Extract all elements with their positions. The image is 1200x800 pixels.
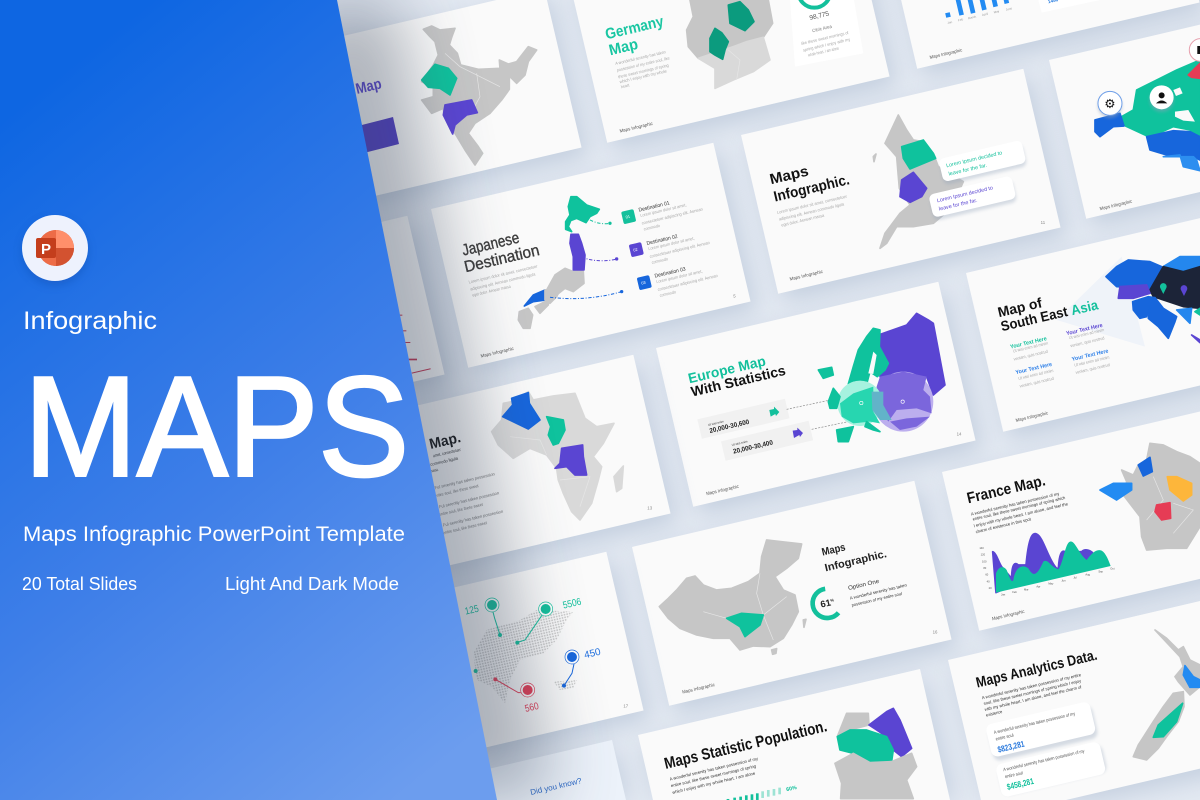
panel shadow bbox=[300, 0, 555, 800]
icon: person marker bbox=[1150, 85, 1174, 112]
asia heading bbox=[996, 294, 1100, 334]
new zealand map bbox=[1133, 630, 1200, 760]
chart footer: Maps Infographic bbox=[929, 47, 963, 60]
chart value card bbox=[1038, 0, 1100, 13]
africa body text: massa. bbox=[430, 467, 439, 474]
uk callout one bbox=[938, 140, 1027, 185]
area chart bbox=[979, 534, 1115, 596]
dotted map bbox=[473, 610, 577, 703]
destination 01: consectetuer adipiscing elit. Aenean bbox=[641, 206, 704, 226]
africa map bbox=[492, 392, 623, 520]
destination 01 bbox=[621, 201, 704, 232]
icon: map marker bbox=[1189, 39, 1200, 61]
marker 5506: 5506 bbox=[562, 597, 583, 612]
destination 02: commodo bbox=[651, 256, 669, 265]
slide: Japanese Destination bbox=[431, 143, 758, 376]
china footer: Maps Infographic bbox=[682, 682, 716, 695]
icon: PowerPoint logo: P bbox=[41, 241, 51, 258]
dots page number: 17 bbox=[623, 703, 629, 708]
asia bullet text bbox=[1012, 327, 1111, 389]
bar chart: Feb bbox=[958, 17, 964, 22]
analytics card two: A wonderful serenity has taken possession of my bbox=[1003, 748, 1086, 772]
germany body text: heart. bbox=[620, 82, 631, 89]
germany stat card: like these sweet mornings of bbox=[801, 30, 850, 46]
uk callout two bbox=[928, 176, 1017, 221]
population pictogram bbox=[727, 785, 798, 800]
population body text: which I enjoy with my whole heart. I am alone bbox=[672, 771, 756, 795]
europe heading: Europe Map bbox=[686, 353, 767, 386]
analytics card two: $458,281 bbox=[1006, 776, 1035, 792]
analytics body text: A wonderful serenity has taken possession of my entire bbox=[981, 672, 1082, 700]
population body text: entire soul, like these sweet mornings of spring bbox=[670, 763, 757, 788]
europe stat card one: 20,000-30,600 bbox=[709, 419, 750, 435]
population pictogram: 60% bbox=[786, 785, 798, 793]
asia bullets: Your Text Here bbox=[1015, 362, 1053, 376]
title: MAPS: MAPS bbox=[24, 348, 409, 506]
mode note: Light And Dark Mode bbox=[225, 574, 399, 594]
marker 450: 450 bbox=[583, 647, 602, 661]
africa page number: 13 bbox=[647, 506, 653, 511]
germany body text: A wonderful serenity has taken bbox=[615, 49, 667, 66]
germany heading: Map bbox=[607, 36, 640, 59]
uk callout two: Lorem Ipsum decided to bbox=[936, 185, 994, 204]
china map bbox=[659, 540, 806, 654]
destination 02: Destination 02 bbox=[646, 234, 678, 247]
slide: Africa Map: Ful serenity has taken possession bbox=[442, 509, 504, 528]
uk footer: Maps Infographic bbox=[789, 269, 824, 282]
analytics body text: existence bbox=[985, 709, 1003, 718]
america footer: Maps Infographic bbox=[1099, 199, 1133, 211]
destination 01: Destination 01 bbox=[638, 201, 670, 214]
slide: China Maps Infographic bbox=[632, 481, 959, 714]
uk body text bbox=[776, 194, 848, 228]
slide: Maps Analytics Data bbox=[948, 594, 1200, 800]
population heading: Maps Statistic Population. bbox=[663, 718, 829, 773]
area chart: 20 bbox=[989, 586, 992, 590]
area chart: 100 bbox=[982, 559, 987, 563]
europe heading: With Statistics bbox=[689, 362, 787, 400]
africa body text: commodo ligula bbox=[430, 455, 459, 467]
slide: bar chart bbox=[880, 0, 1200, 77]
area chart: Oct bbox=[1110, 567, 1115, 571]
area chart: 40 bbox=[987, 579, 990, 583]
slide: bottom tinted slide bbox=[356, 740, 630, 800]
asia bullet text: veniam, quis nostrud bbox=[1019, 376, 1055, 389]
uk map bbox=[873, 115, 963, 248]
europe footer: Maps Infographic bbox=[706, 484, 740, 496]
area chart: May bbox=[1048, 582, 1054, 586]
slide: Africa Map: entire soul, like these sweet bbox=[438, 502, 484, 517]
destination 02: consectetuer adipiscing elit. Aenean bbox=[649, 240, 711, 259]
france map bbox=[1100, 443, 1200, 550]
europe stat card two: 20,000-30,400 bbox=[733, 439, 774, 456]
asia bullet text: veniam, quis nostrud bbox=[1070, 335, 1105, 348]
uk heading: Maps bbox=[768, 164, 810, 188]
area chart: 60 bbox=[985, 573, 989, 577]
france body text: A wonderful serenity has taken possession of my bbox=[970, 491, 1061, 517]
germany population map bbox=[835, 708, 917, 799]
france body text: I enjoy with my whole heart. I am alone, and feel the bbox=[973, 501, 1069, 528]
japan body text: Lorem ipsum dolor sit amet, consectetuer bbox=[468, 263, 538, 285]
destination 01: Lorem ipsum dolor sit amet, bbox=[640, 202, 687, 218]
analytics heading: Maps Analytics Data. bbox=[975, 648, 1099, 692]
germany stat card: 98,775 bbox=[809, 10, 830, 22]
bar chart: June bbox=[1005, 6, 1013, 12]
japan body text: eget dolor. Aenean massa bbox=[472, 284, 512, 298]
asia bullet text: Ut wisi enim ad minim bbox=[1068, 327, 1105, 340]
germany body text: these sweet mornings of spring bbox=[618, 63, 670, 79]
asia footer: Maps Infographic bbox=[1015, 410, 1049, 423]
europe stat card two bbox=[721, 421, 813, 461]
asia bullet text: veniam, quis nostrud bbox=[1013, 349, 1049, 362]
analytics card two: entire soul bbox=[1004, 770, 1023, 779]
area chart: Jan bbox=[1001, 592, 1006, 596]
europe stat card one bbox=[697, 399, 790, 439]
destination 01: commodo bbox=[643, 223, 661, 232]
japan dashed connectors bbox=[550, 220, 622, 299]
subtitle: Infographic: Infographic bbox=[23, 307, 157, 335]
population body text bbox=[669, 756, 759, 795]
destination 02: Lorem ipsum dolor sit amet, bbox=[648, 236, 695, 251]
area chart: Sep bbox=[1098, 570, 1104, 574]
asia light backdrop bbox=[1057, 257, 1145, 347]
destination 03: consectetuer adipiscing elit. Aenean bbox=[657, 273, 719, 292]
north america map bbox=[1095, 60, 1200, 171]
analytics card one: $823,281 bbox=[996, 739, 1026, 755]
slide: Germany map bbox=[570, 0, 897, 151]
population body text: A wonderful serenity has taken possession of my bbox=[669, 756, 759, 782]
asia heading: Map of bbox=[996, 294, 1044, 320]
left location dot bbox=[474, 669, 478, 673]
area chart: Apr bbox=[1036, 585, 1041, 589]
slide count: 20 Total Slides bbox=[22, 574, 137, 594]
germany body text: possession of my entire soul, like bbox=[616, 55, 671, 73]
uk heading: Infographic. bbox=[772, 172, 851, 206]
slide: India map bbox=[262, 0, 589, 222]
slide: UK Maps Infographic bbox=[741, 69, 1068, 302]
india purple card bbox=[350, 117, 399, 155]
bar chart: Jan bbox=[947, 20, 953, 25]
destination 01: 01 bbox=[625, 214, 631, 220]
india heading: Map bbox=[354, 75, 383, 98]
marker 560: 560 bbox=[524, 701, 540, 715]
japan heading: Japanese bbox=[460, 230, 521, 260]
germany body text bbox=[615, 49, 671, 89]
china heading: Maps bbox=[821, 541, 847, 559]
destination 03: commodo bbox=[659, 289, 677, 298]
uk body text: Lorem ipsum dolor sit amet, consectetuer bbox=[776, 194, 848, 215]
slide: Africa Map: entire soul, like these sweet bbox=[434, 483, 480, 498]
germany body text: which I enjoy with my whole bbox=[619, 68, 668, 84]
area chart: 120 bbox=[981, 553, 986, 557]
destination 02: 02 bbox=[633, 247, 639, 253]
china page number: 16 bbox=[933, 630, 938, 635]
asia bullet text: Ut wisi enim ad minim bbox=[1012, 340, 1049, 354]
france heading: France Map. bbox=[965, 472, 1047, 507]
slide: Europe Map bbox=[656, 282, 983, 515]
france footer: Maps Infographic bbox=[991, 609, 1026, 621]
slide: Africa Map: Ful serenity has taken possession bbox=[438, 490, 500, 509]
uk callout one: Lorem Ipsum decided to bbox=[946, 150, 1003, 169]
donut chart 61%: % bbox=[830, 597, 835, 603]
europe stat card two: Ut wisi enim bbox=[731, 439, 748, 447]
japan heading: Destination bbox=[463, 242, 541, 276]
icon: purple pin bbox=[1181, 285, 1187, 296]
africa body text: amet, consectetuer bbox=[432, 447, 462, 458]
area chart: 80 bbox=[983, 566, 987, 570]
area chart: Mar bbox=[1024, 587, 1029, 591]
destination 03: Destination 03 bbox=[654, 267, 686, 280]
europe page number: 14 bbox=[957, 431, 962, 436]
asia map bbox=[1106, 257, 1200, 343]
asia bullets: Your Text Here bbox=[1071, 349, 1109, 363]
asia heading: Asia bbox=[1069, 296, 1100, 318]
japan footer: Maps Infographic bbox=[480, 346, 515, 359]
japan map bbox=[518, 197, 599, 328]
slide: Africa Map: entire soul, like these sweet bbox=[442, 520, 488, 535]
europe dashed leaders bbox=[787, 399, 848, 429]
india map bbox=[422, 26, 537, 165]
france body text bbox=[970, 491, 1069, 534]
analytics card one bbox=[985, 701, 1099, 762]
uk callout one: leave for the far. bbox=[948, 163, 988, 178]
blue left panel bbox=[0, 0, 497, 800]
bar chart bbox=[945, 0, 1013, 25]
area chart: Aug bbox=[1085, 573, 1091, 577]
germany stat card bbox=[790, 0, 863, 67]
asia bullet text: veniam, quis nostrud bbox=[1075, 362, 1111, 375]
uk body text: eget dolor. Aenean massa bbox=[781, 213, 825, 228]
icon: teal pin bbox=[1160, 283, 1167, 294]
france body text: entire soul, like these sweet mornings of spring which bbox=[972, 495, 1066, 522]
germany heading: Germany bbox=[604, 13, 666, 43]
slide: dotted world map bbox=[324, 552, 651, 785]
germany stat card: spring which I enjoy with my bbox=[802, 37, 851, 53]
japan page number: 5 bbox=[733, 293, 736, 298]
marker 560 bbox=[493, 677, 540, 715]
slide: Africa Map bbox=[351, 355, 678, 588]
asia heading: South East bbox=[999, 303, 1069, 334]
template name: Maps Infographic PowerPoint Template bbox=[23, 523, 405, 546]
germany stat card: Citric Area bbox=[812, 24, 833, 33]
asia bullet text: Ut wisi enim ad minim bbox=[1074, 354, 1110, 368]
area chart: Jun bbox=[1061, 579, 1066, 583]
icon: PowerPoint logo bbox=[22, 215, 88, 284]
france body text: charm of existence in this spot bbox=[975, 516, 1032, 534]
slide: Africa Map: Ful serenity has taken possession bbox=[434, 471, 496, 490]
marker 125: 125 bbox=[464, 604, 480, 618]
asia bullets: Your Text Here bbox=[1010, 336, 1047, 351]
destination 03: 03 bbox=[641, 280, 647, 286]
africa body text bbox=[430, 447, 462, 474]
analytics body text bbox=[981, 672, 1083, 718]
donut chart 61% bbox=[807, 583, 848, 624]
slide: hidden left slide bbox=[125, 216, 452, 449]
analytics card two bbox=[995, 741, 1108, 798]
marker 450 bbox=[562, 647, 602, 688]
area chart: Feb bbox=[1012, 590, 1017, 594]
option one text: possession of my entire soul bbox=[851, 591, 903, 608]
analytics body text: with my whole heart. I am alone, and feel the charm of bbox=[984, 684, 1083, 712]
bar chart: April bbox=[982, 12, 989, 17]
asia bullets bbox=[1010, 323, 1109, 376]
option one text: A wonderful serenity has taken bbox=[849, 582, 908, 601]
marker 5506 bbox=[515, 597, 583, 645]
analytics body text: soul, like these sweet mornings of spring which I enjoy bbox=[983, 678, 1082, 706]
bar chart: March bbox=[968, 14, 977, 20]
icon: gear marker bbox=[1098, 91, 1122, 118]
europe map bbox=[818, 313, 945, 442]
destination 03 bbox=[637, 267, 719, 298]
germany stat card: whole heart. I am alone bbox=[807, 45, 840, 58]
japan body text: adipiscing elit. Aenean commodo ligula bbox=[470, 271, 536, 292]
bar chart: May bbox=[993, 9, 1000, 14]
uk callout two: leave for the far. bbox=[938, 198, 978, 213]
japan body text bbox=[468, 263, 538, 298]
uk body text: adipiscing elit. Aenean commodo ligula bbox=[778, 201, 845, 222]
uk page number: 11 bbox=[1041, 220, 1046, 225]
africa heading: Map. bbox=[428, 430, 462, 453]
destination 03: Lorem ipsum dolor sit amet, bbox=[656, 269, 703, 284]
icon: gear marker: ⚙ bbox=[1104, 96, 1116, 111]
donut chart 61%: 61 bbox=[819, 597, 832, 610]
destination 02 bbox=[629, 234, 711, 265]
marker 125 bbox=[464, 598, 502, 637]
europe stat card one: Ut wisi enim bbox=[708, 419, 725, 427]
analytics card one: entire soul bbox=[995, 733, 1014, 742]
germany footer: Maps Infographic bbox=[619, 121, 654, 134]
option one text: Option One bbox=[848, 579, 881, 592]
area chart: Jul bbox=[1073, 576, 1077, 580]
asia bullets: Your Text Here bbox=[1066, 323, 1103, 337]
china heading: Infographic. bbox=[824, 548, 888, 574]
slide: North America bbox=[1049, 0, 1200, 227]
analytics card one: A wonderful serenity has taken possession of my bbox=[993, 711, 1076, 735]
slide: France Map bbox=[942, 406, 1200, 639]
slide: Maps Statistic Population bbox=[638, 669, 955, 800]
asia bullet text: Ut wisi enim ad minim bbox=[1018, 368, 1054, 381]
option one text bbox=[848, 579, 908, 608]
slide: South East Asia bbox=[966, 207, 1200, 440]
know text: Did you know? bbox=[529, 776, 583, 797]
germany map bbox=[687, 0, 773, 88]
germany heading bbox=[604, 13, 666, 59]
area chart: 140 bbox=[979, 546, 984, 550]
